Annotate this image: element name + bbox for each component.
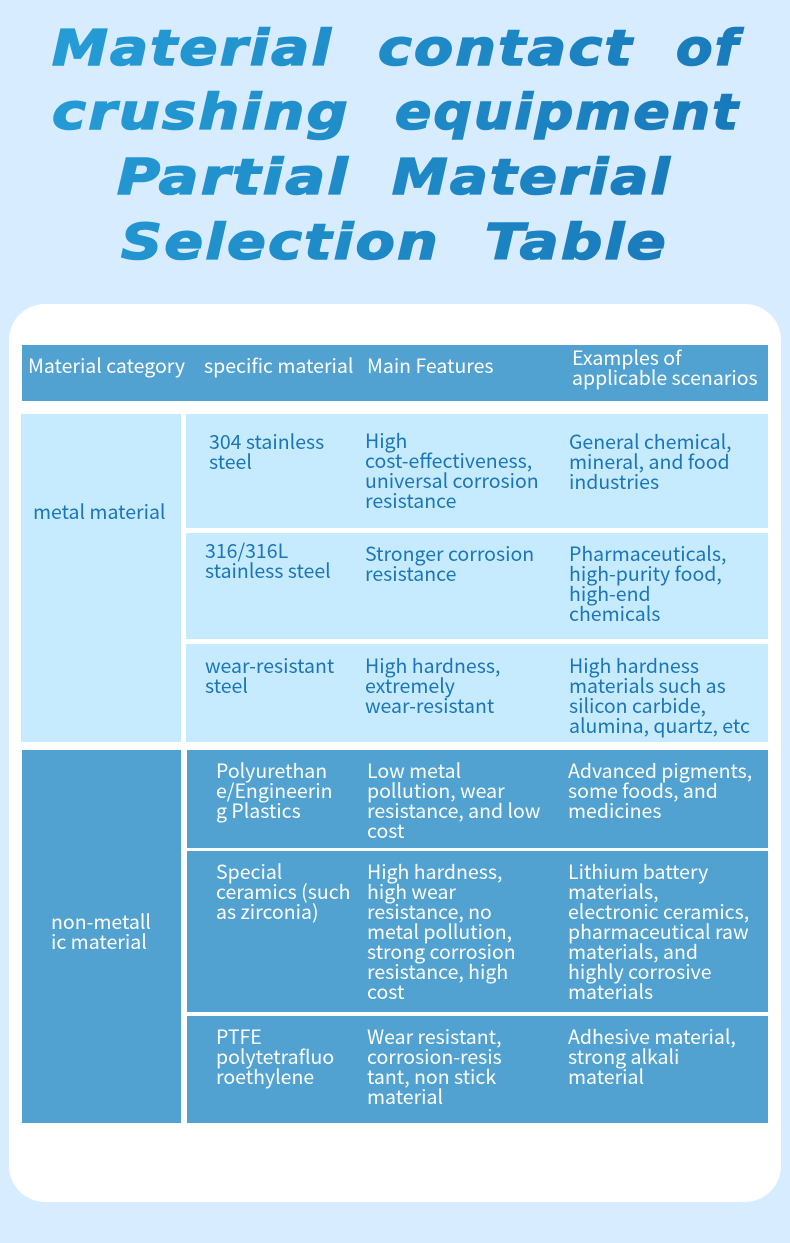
- row: polyurethane / engineering plastics: resistance, and low: [367, 795, 540, 824]
- row: wear-resistant steel: materials such as: [569, 670, 726, 699]
- row: special ceramics: High hardness,: [367, 856, 502, 885]
- row: special ceramics: strong corrosion: [367, 936, 516, 965]
- row: PTFE: [187, 1016, 768, 1123]
- row: PTFE: strong alkali: [568, 1041, 679, 1070]
- row: special ceramics: Lithium battery: [568, 856, 708, 885]
- row: special ceramics: ceramics (such: [216, 876, 350, 905]
- title: [52, 20, 744, 271]
- title: equipment: [395, 84, 740, 141]
- row: special ceramics: highly corrosive: [568, 956, 712, 985]
- row: polyurethane / engineering plastics: g Plastics: [216, 795, 301, 824]
- title: Selection: [121, 214, 440, 271]
- title: Partial: [117, 149, 350, 206]
- row: wear-resistant steel: [186, 644, 768, 742]
- table header row: Main Features: [367, 350, 494, 379]
- row: special ceramics: resistance, high: [367, 956, 508, 985]
- row: 304 stainless steel: General chemical,: [569, 426, 732, 455]
- row: special ceramics: materials, and: [568, 936, 698, 965]
- row: PTFE: material: [568, 1061, 644, 1090]
- title: Material: [392, 149, 672, 206]
- row: 316/316L stainless steel: high-end: [569, 578, 651, 607]
- row: special ceramics: resistance, no: [367, 896, 492, 925]
- row: 304 stainless steel: resistance: [365, 485, 456, 514]
- row: wear-resistant steel: alumina, quartz, etc: [569, 710, 750, 739]
- row: wear-resistant steel: wear-resistant: [365, 690, 494, 719]
- category: non-metallic material: non-metall: [51, 906, 151, 935]
- row: special ceramics: metal pollution,: [367, 916, 512, 945]
- row: 316/316L stainless steel: [186, 533, 768, 639]
- row: 304 stainless steel: cost-effectiveness,: [365, 445, 532, 474]
- row: 316/316L stainless steel: Stronger corrosion: [365, 538, 534, 567]
- row: 316/316L stainless steel: Pharmaceuticals,: [569, 538, 726, 567]
- row: PTFE: roethylene: [216, 1061, 314, 1090]
- category: non-metallic material: [22, 750, 181, 1123]
- table header row: specific material: [204, 350, 353, 379]
- table header row: Material category: [28, 350, 185, 379]
- row: wear-resistant steel: steel: [205, 670, 248, 699]
- row: 316/316L stainless steel: high-purity food,: [569, 558, 722, 587]
- row: polyurethane / engineering plastics: Low metal: [367, 755, 461, 784]
- title: of: [676, 20, 744, 77]
- title: crushing: [52, 84, 350, 141]
- row: polyurethane / engineering plastics: cost: [367, 815, 404, 844]
- row: 304 stainless steel: steel: [209, 446, 252, 475]
- row: wear-resistant steel: High hardness,: [365, 650, 500, 679]
- row: 304 stainless steel: 304 stainless: [209, 426, 324, 455]
- category: metal material: [21, 414, 181, 742]
- row: PTFE: PTFE: [216, 1021, 262, 1050]
- row: wear-resistant steel: extremely: [365, 670, 455, 699]
- row: polyurethane / engineering plastics: some foods, and: [568, 775, 718, 804]
- row: wear-resistant steel: silicon carbide,: [569, 690, 706, 719]
- row: special ceramics: materials: [568, 976, 653, 1005]
- row: 316/316L stainless steel: chemicals: [569, 598, 660, 627]
- row: PTFE: tant, non stick: [367, 1061, 496, 1090]
- title: contact: [378, 20, 634, 77]
- table header row: [22, 345, 768, 401]
- row: PTFE: corrosion-resis: [367, 1041, 502, 1070]
- row: PTFE: Adhesive material,: [568, 1021, 736, 1050]
- row: 304 stainless steel: High: [365, 425, 407, 454]
- row: PTFE: material: [367, 1081, 443, 1110]
- row: polyurethane / engineering plastics: medicines: [568, 795, 661, 824]
- row: 304 stainless steel: industries: [569, 466, 659, 495]
- row: 304 stainless steel: universal corrosion: [365, 465, 539, 494]
- row: 304 stainless steel: mineral, and food: [569, 446, 730, 475]
- row: special ceramics: materials,: [568, 876, 659, 905]
- row: 316/316L stainless steel: 316/316L: [205, 535, 288, 564]
- row: special ceramics: electronic ceramics,: [568, 896, 749, 925]
- row: special ceramics: pharmaceutical raw: [568, 916, 749, 945]
- row: polyurethane / engineering plastics: Advanced pigments,: [568, 755, 752, 784]
- row: 316/316L stainless steel: stainless steel: [205, 555, 331, 584]
- row: polyurethane / engineering plastics: [187, 750, 768, 848]
- row: 304 stainless steel: [186, 414, 768, 528]
- row: special ceramics: Special: [216, 856, 282, 885]
- row: polyurethane / engineering plastics: e/Engineerin: [216, 775, 333, 804]
- category: metal material: metal material: [33, 496, 165, 525]
- row: polyurethane / engineering plastics: pollution, wear: [367, 775, 505, 804]
- row: polyurethane / engineering plastics: Polyurethan: [216, 755, 327, 784]
- panel: white table card: [9, 304, 781, 1202]
- table header row: Examples of: [572, 342, 681, 371]
- category: non-metallic material: ic material: [51, 926, 147, 955]
- row: special ceramics: high wear: [367, 876, 456, 905]
- row: special ceramics: as zirconia): [216, 896, 319, 925]
- row: PTFE: polytetrafluo: [216, 1041, 334, 1070]
- title: Material: [52, 20, 333, 77]
- row: wear-resistant steel: High hardness: [569, 650, 699, 679]
- row: special ceramics: cost: [367, 976, 404, 1005]
- row: special ceramics: [187, 851, 768, 1012]
- row: wear-resistant steel: wear-resistant: [205, 650, 334, 679]
- title: Table: [485, 214, 668, 271]
- table header row: applicable scenarios: [572, 362, 758, 391]
- row: PTFE: Wear resistant,: [367, 1021, 502, 1050]
- row: 316/316L stainless steel: resistance: [365, 558, 456, 587]
